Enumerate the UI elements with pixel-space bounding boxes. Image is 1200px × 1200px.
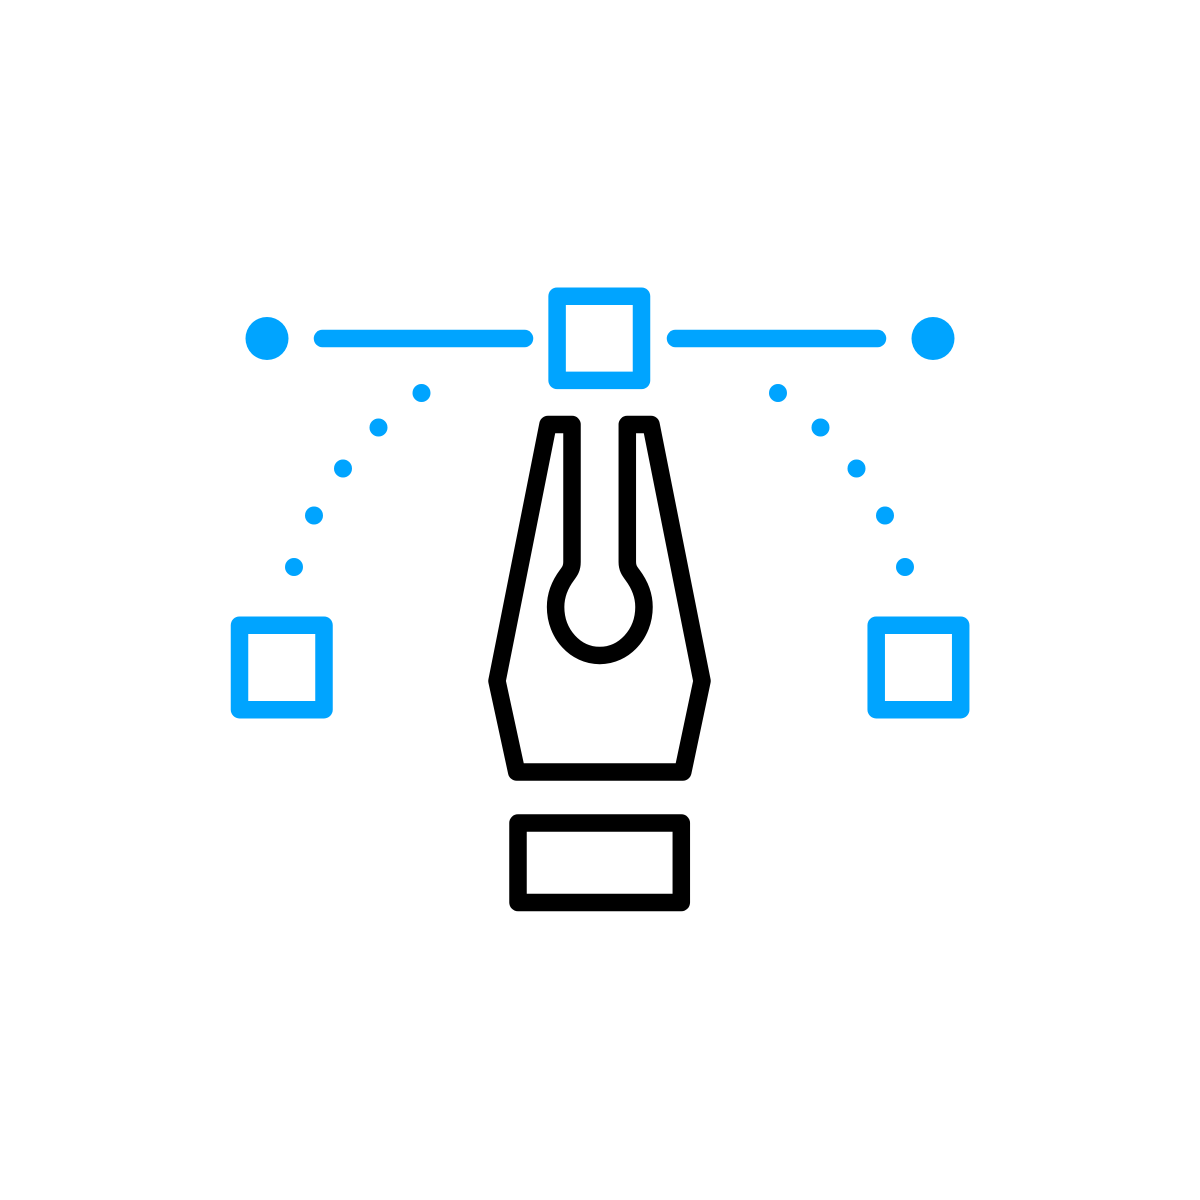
anchor square: right [876,625,961,710]
icon: pen nib [497,424,702,772]
icon: pen base rectangle [518,823,681,902]
handle line: right [676,330,878,347]
icon: bezier handles [240,296,961,710]
handle line: left [322,330,524,347]
anchor square: top centre [557,296,642,380]
dotted curve: right [769,384,914,576]
handle end dot: left [246,317,288,360]
anchor square: left [240,625,324,710]
handle end dot: right [912,317,954,360]
dotted curve: left [285,384,430,576]
